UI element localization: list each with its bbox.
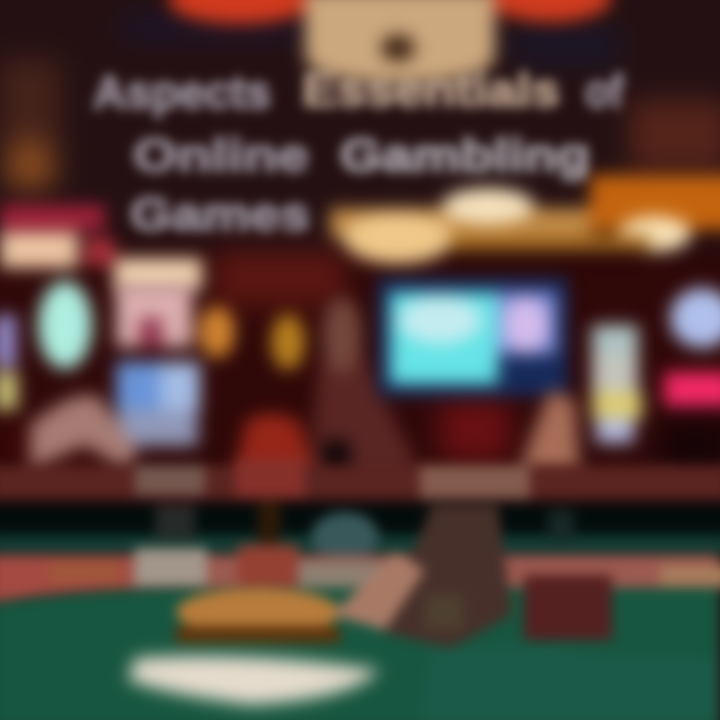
title text: Essentials: [302, 64, 560, 116]
table edge band: [0, 545, 720, 604]
title text: Games: [130, 188, 310, 240]
green table felt: [0, 588, 720, 720]
title text: of: [585, 65, 624, 117]
white card on table: [128, 656, 380, 705]
ceiling dome and red lights: [168, 0, 612, 84]
title text: Aspects: [93, 66, 271, 118]
central screen: [378, 278, 568, 396]
right slot machines: [520, 288, 720, 470]
left slot machines: [0, 281, 305, 470]
title text: Gambling: [340, 129, 590, 181]
ceiling and wall background: [0, 0, 720, 480]
central figure: [235, 295, 420, 480]
upper lights band: [0, 175, 720, 290]
title text: [93, 64, 624, 240]
table rail: [0, 458, 720, 562]
title text: Online: [133, 129, 309, 181]
chip stacks: [176, 505, 612, 648]
